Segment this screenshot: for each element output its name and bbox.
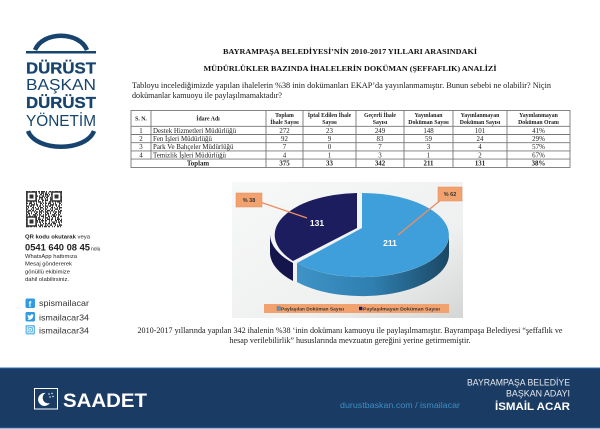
logo: Dürüst Başkan Dürüst Yönetim: DÜRÜST	[26, 60, 97, 78]
candidate name: İSMAİL ACAR	[495, 400, 570, 413]
table rows: 2	[478, 152, 482, 159]
table header: Yayınlanmayan	[461, 113, 500, 119]
table rows: Temizlik İşleri Müdürlüğü	[153, 152, 227, 159]
table header: Sayısı	[373, 120, 388, 126]
chart legend: Paylaşılmayan Doküman Sayısı	[363, 306, 440, 312]
icon: instagram	[26, 325, 35, 334]
QR and WhatsApp contact text	[25, 234, 101, 283]
intro question text: Tabloyu incelediğimizde yapılan ihalelerin %38 inin dokümanları EKAP’da yayınlanmamıştır. Bunun sebebi ne olabilir? Niçin	[132, 81, 551, 90]
chart legend: Paylaşılan Doküman Sayısı	[281, 306, 344, 312]
table header: Doküman Sayısı	[460, 120, 501, 126]
table rows: 4	[139, 152, 143, 159]
table header: İhale Sayısı	[270, 119, 299, 126]
table rows: 272	[279, 128, 290, 135]
QR and WhatsApp contact text: nolu	[91, 246, 101, 252]
table rows: 148	[423, 128, 434, 135]
title: MÜDÜRLÜKLER BAZINDA İHALELERİN DOKÜMAN (ŞEFFAFLIK) ANALİZİ	[204, 63, 497, 73]
candidate name: BAYRAMPAŞA BELEDİYE	[467, 378, 570, 388]
icon: facebook: f	[29, 300, 32, 309]
logo: Dürüst Başkan Dürüst Yönetim	[26, 36, 97, 147]
party name: SAADET	[63, 390, 147, 412]
QR and WhatsApp contact text: dahil olabilirsiniz.	[25, 277, 69, 283]
table header: Doküman Oranı	[518, 120, 559, 126]
table rows: 1	[328, 152, 332, 159]
table rows: 3	[139, 144, 143, 151]
callout: %62	[398, 187, 462, 235]
conclusion text	[138, 326, 563, 345]
social media links	[26, 298, 89, 336]
table header	[135, 112, 559, 126]
table rows: 101	[475, 128, 486, 135]
footer band	[0, 368, 600, 428]
table header: Sayısı	[322, 120, 337, 126]
table rows: 3	[427, 144, 431, 151]
table header: Doküman Sayısı	[408, 120, 449, 126]
table rows	[139, 128, 545, 159]
logo: Dürüst Başkan Dürüst Yönetim: BAŞKAN	[26, 77, 96, 94]
table total row: 131	[475, 161, 486, 168]
title: BAYRAMPAŞA BELEDİYESİ’NİN 2010-2017 YILLARI ARASINDAKİ	[223, 46, 477, 56]
QR and WhatsApp contact text: QR kodu okutarak veya	[25, 234, 91, 240]
table rows: Destek Hizmetleri Müdürlüğü	[153, 128, 237, 135]
table header: Geçerli İhale	[364, 112, 396, 119]
table total row: Toplam	[187, 161, 209, 168]
social handles: ismailacar34	[39, 312, 89, 322]
table header: İptal Edilen İhale	[308, 112, 352, 119]
table total row: 211	[424, 161, 434, 168]
social handles	[39, 298, 89, 336]
table rows: 1	[427, 152, 431, 159]
table rows: 24	[477, 136, 484, 143]
data table	[131, 110, 570, 168]
table rows: 23	[326, 128, 334, 135]
pie slice: not shared 131: 131	[310, 218, 324, 228]
table total row: 342	[375, 161, 386, 168]
table rows: 57%	[532, 144, 545, 151]
pie slice: not shared 131	[270, 193, 357, 281]
QR and WhatsApp contact text: WhatsApp hattımıza	[25, 254, 78, 260]
logo: Dürüst Başkan Dürüst Yönetim: DÜRÜST	[26, 95, 97, 112]
table header: Yayınlanmayan	[519, 113, 559, 119]
table rows: 2	[139, 136, 143, 143]
table rows: 83	[377, 136, 384, 143]
table header: İdare Adı	[196, 116, 220, 122]
website: durustbaskan.com / ismailacar	[340, 400, 460, 410]
table rows: 4	[478, 144, 482, 151]
callout: %38: % 38	[243, 198, 255, 204]
table rows: 249	[375, 128, 386, 135]
table rows: 4	[283, 152, 287, 159]
chart legend	[264, 304, 449, 313]
candidate name	[467, 378, 570, 413]
social handles: ismailacar34	[39, 326, 89, 336]
pie slice: shared 211	[297, 193, 449, 296]
logo: Dürüst Başkan Dürüst Yönetim: YÖNETİM	[26, 112, 96, 130]
table rows: Park Ve Bahçeler Müdürlüğü	[153, 144, 234, 151]
table rows: 59	[425, 136, 432, 143]
table rows: Fen İşleri Müdürlüğü	[153, 136, 213, 143]
table rows: 92	[281, 136, 288, 143]
QR and WhatsApp contact text: 0541 640 08 45	[25, 242, 91, 254]
table rows: 9	[328, 136, 332, 143]
callout: %38	[236, 193, 307, 218]
intro question text: dokümanlar kamuoyu ile paylaşılmamaktadır?	[132, 91, 282, 100]
table total row: 38%	[532, 161, 546, 168]
table header: Toplam	[275, 113, 294, 119]
icon: Saadet party logo	[34, 388, 58, 409]
icon: twitter	[26, 312, 35, 322]
table total row	[187, 161, 546, 168]
table rows: 67%	[532, 152, 545, 159]
candidate name: BAŞKAN ADAYI	[506, 388, 570, 398]
title	[204, 46, 497, 73]
callout: %62: % 62	[444, 192, 456, 198]
conclusion text: hesap verilebilirlik” hususlarında mevzuatın gereğini yerine getirmemiştir.	[230, 336, 470, 345]
QR code	[26, 192, 62, 226]
table total row: 375	[279, 161, 290, 168]
QR and WhatsApp contact text: Mesaj göndererek	[25, 262, 72, 268]
QR and WhatsApp contact text: gönüllü ekibimize	[25, 270, 70, 276]
conclusion text: 2010-2017 yıllarında yapılan 342 ihalenin %38 ‘inin dokümanı kamuoyu ile paylaşılmamıştır. Bayrampaşa Belediyesi “şeffaflık ve	[138, 326, 563, 335]
table rows: 3	[378, 152, 382, 159]
social handles: spismailacar	[39, 298, 89, 308]
table header: Yayınlanan	[414, 113, 443, 119]
table rows: 7	[378, 144, 382, 151]
table rows: 0	[328, 144, 332, 151]
table rows: 7	[283, 144, 287, 151]
table header: S. N.	[135, 116, 147, 122]
table total row: 33	[326, 161, 334, 168]
table rows: 1	[139, 128, 143, 135]
table rows: 29%	[532, 136, 545, 143]
intro question text	[132, 81, 551, 100]
pie chart panel	[232, 182, 463, 318]
pie slice: shared 211: 211	[383, 238, 397, 248]
table rows: 41%	[532, 128, 545, 135]
